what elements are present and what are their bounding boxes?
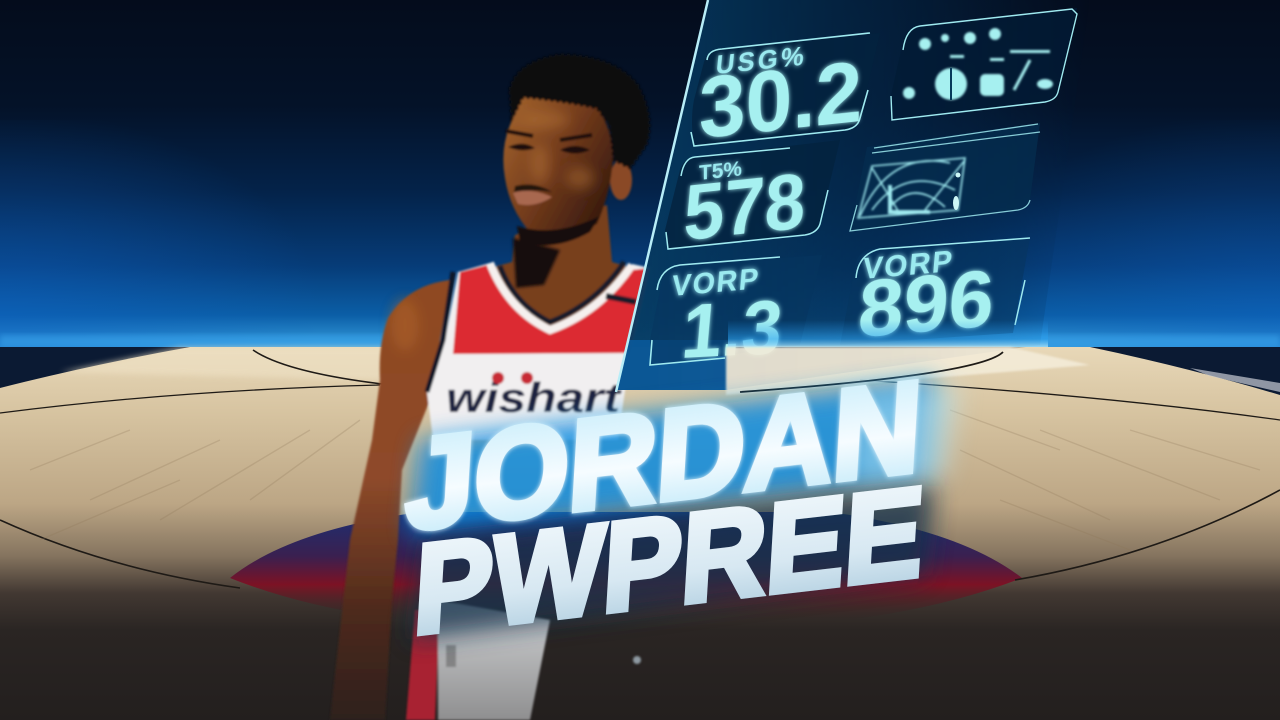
shoulder highlight bbox=[391, 299, 419, 351]
stat card: TS% 578 bbox=[665, 140, 840, 257]
stat card: TS% 578: 578 bbox=[682, 156, 807, 257]
court lines bbox=[0, 350, 1280, 588]
background: dark blue arena bbox=[0, 0, 1280, 350]
basketball court floor bbox=[0, 347, 1280, 720]
brows and nose bbox=[506, 131, 592, 140]
face highlights bbox=[520, 111, 594, 189]
glow behind title bbox=[410, 378, 960, 640]
ear bbox=[610, 160, 632, 200]
beard and chin bbox=[517, 216, 600, 245]
court centre circle bbox=[230, 512, 1022, 622]
stat card: VORP 1.3 bbox=[650, 255, 822, 375]
corner banner bbox=[1190, 368, 1280, 392]
centre arc line bbox=[740, 352, 1003, 392]
title: PWPREE: PWPREE bbox=[410, 459, 927, 661]
jersey bbox=[427, 262, 650, 440]
diagram card: player icons bbox=[890, 8, 1077, 120]
bright floor patch bbox=[726, 347, 1090, 395]
eyes bbox=[508, 144, 590, 154]
diagram card: court shot chart bbox=[850, 123, 1040, 231]
stat card: USG% 30.2: 30.2 bbox=[699, 44, 862, 157]
light dot bbox=[633, 656, 641, 664]
neck shadow bbox=[513, 238, 560, 288]
wood texture streaks bbox=[30, 410, 1260, 550]
stat card: VORP 896: VORP bbox=[861, 245, 955, 286]
stat card: TS% 578: T5% bbox=[699, 157, 742, 185]
left arm bbox=[330, 280, 450, 720]
jersey wordmark: wishart bbox=[446, 374, 622, 421]
stat card: VORP 896: 896 bbox=[856, 253, 996, 355]
shorts bbox=[406, 600, 550, 720]
hud panel: holographic stats bbox=[616, 0, 1090, 395]
stat card: USG% 30.2: USG% bbox=[714, 40, 808, 80]
neck and chest bbox=[490, 205, 632, 330]
face bbox=[503, 96, 613, 235]
mouth bbox=[513, 191, 552, 205]
hair bbox=[510, 55, 649, 168]
title: JORDAN: JORDAN bbox=[402, 354, 925, 558]
stat card: VORP 1.3: 1.3 bbox=[679, 285, 786, 375]
stat card: VORP 1.3: VORP bbox=[670, 263, 761, 303]
stat card: VORP 896 bbox=[840, 237, 1030, 355]
floor glow over panel bottom bbox=[728, 320, 1048, 347]
player figure bbox=[330, 55, 650, 720]
